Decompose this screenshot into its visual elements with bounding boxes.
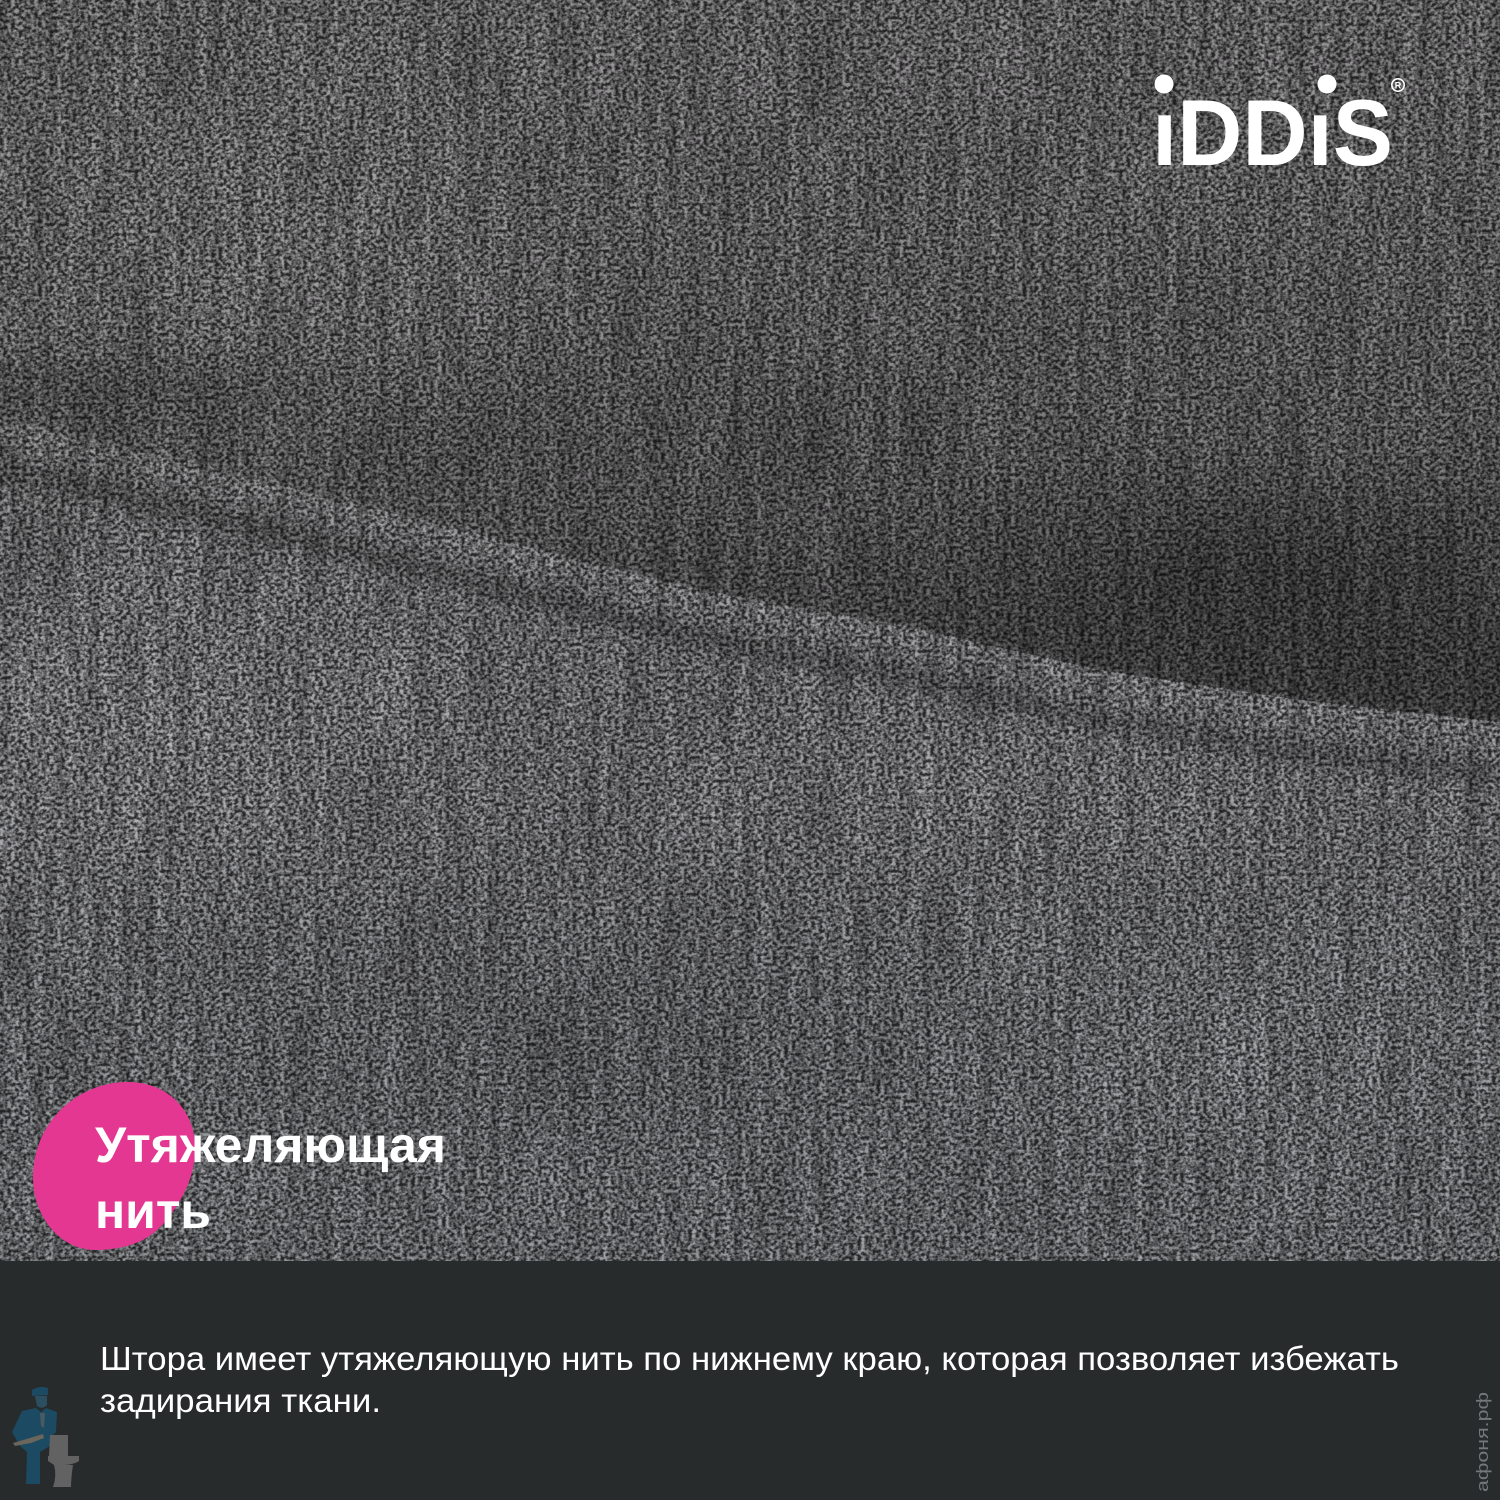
toilet [48,1435,79,1487]
logo: IDDIS [1152,74,1404,185]
upper fabric layer [0,0,1500,740]
heading line 1: Утяжеляющая [95,1117,446,1173]
plumber figure [12,1387,57,1484]
vertical watermark: афоня.рф [1473,1392,1492,1492]
wrench [13,1434,44,1446]
logo dots [1154,74,1336,94]
pink blob accent [33,1082,195,1250]
heading [95,1117,446,1239]
lower fabric layer [0,420,1500,1261]
registered mark: R [1395,80,1402,90]
hem seam fold [0,468,1500,775]
heading line 2: нить [95,1183,211,1239]
description line 1: Штора имеет утяжеляющую нить по нижнему краю, которая позволяет избежать [100,1341,1399,1378]
registered mark [1392,79,1404,91]
bottom panel [0,1261,1500,1500]
icon: plumber with toilet [12,1387,79,1487]
logo wordmark: ıDDıS [1152,80,1393,185]
description line 2: задирания ткани. [100,1383,381,1420]
description text [100,1341,1399,1420]
